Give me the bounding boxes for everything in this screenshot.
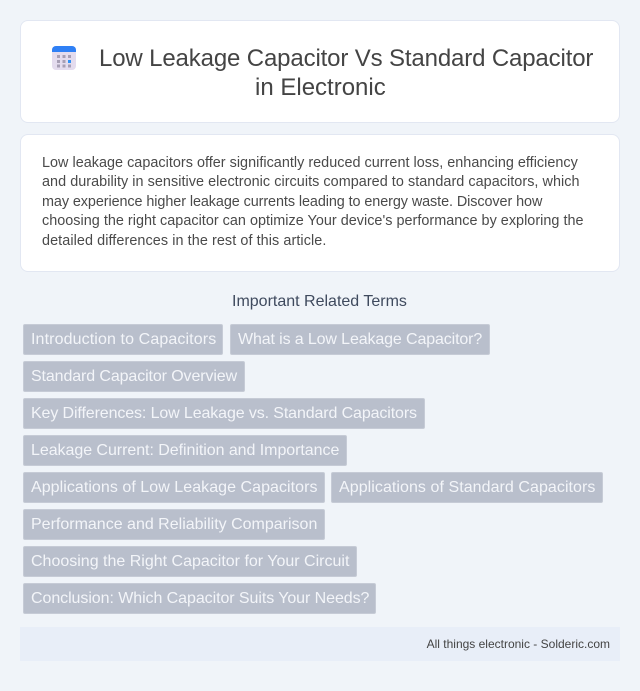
tag	[23, 398, 425, 429]
tag	[230, 324, 490, 355]
tag: Performance and Reliability Comparison	[31, 516, 317, 533]
footer text: All things electronic - Solderic.com	[427, 637, 610, 651]
tag	[23, 361, 245, 392]
intro paragraph	[42, 155, 584, 249]
tag: Leakage Current: Definition and Importance	[31, 442, 339, 459]
tag: Introduction to Capacitors	[31, 331, 216, 348]
intro paragraph: Low leakage capacitors offer significantly reduced current loss, enhancing efficiency	[42, 155, 578, 171]
tag: Applications of Standard Capacitors	[339, 479, 595, 496]
tag: Standard Capacitor Overview	[31, 368, 237, 385]
title	[99, 45, 593, 101]
title: in Electronic	[255, 74, 386, 101]
tag	[331, 472, 603, 503]
intro paragraph: choosing the right capacitor can optimize Your device's performance by exploring the	[42, 213, 584, 229]
title card	[20, 20, 620, 123]
intro card	[20, 134, 620, 272]
tag: What is a Low Leakage Capacitor?	[238, 331, 482, 348]
tag: Conclusion: Which Capacitor Suits Your Needs?	[31, 590, 369, 607]
related terms heading: Important Related Terms	[232, 293, 407, 310]
tag	[23, 509, 325, 540]
tag	[23, 583, 376, 614]
tag	[23, 546, 357, 577]
tag	[23, 472, 325, 503]
tag: Applications of Low Leakage Capacitors	[31, 479, 318, 496]
title: Low Leakage Capacitor Vs Standard Capacitor	[99, 45, 593, 72]
footer	[20, 627, 620, 661]
tag	[23, 324, 223, 355]
intro paragraph: may experience higher leakage currents leading to energy waste. Discover how	[42, 194, 542, 210]
icon: calendar	[52, 46, 76, 70]
intro paragraph: and durability in sensitive electronic circuits compared to standard capacitors, which	[42, 174, 580, 190]
tag	[23, 435, 347, 466]
tag list	[23, 324, 603, 614]
tag: Choosing the Right Capacitor for Your Circuit	[31, 553, 349, 570]
intro paragraph: detailed differences in the rest of this article.	[42, 233, 326, 249]
tag: Key Differences: Low Leakage vs. Standard Capacitors	[31, 405, 417, 422]
